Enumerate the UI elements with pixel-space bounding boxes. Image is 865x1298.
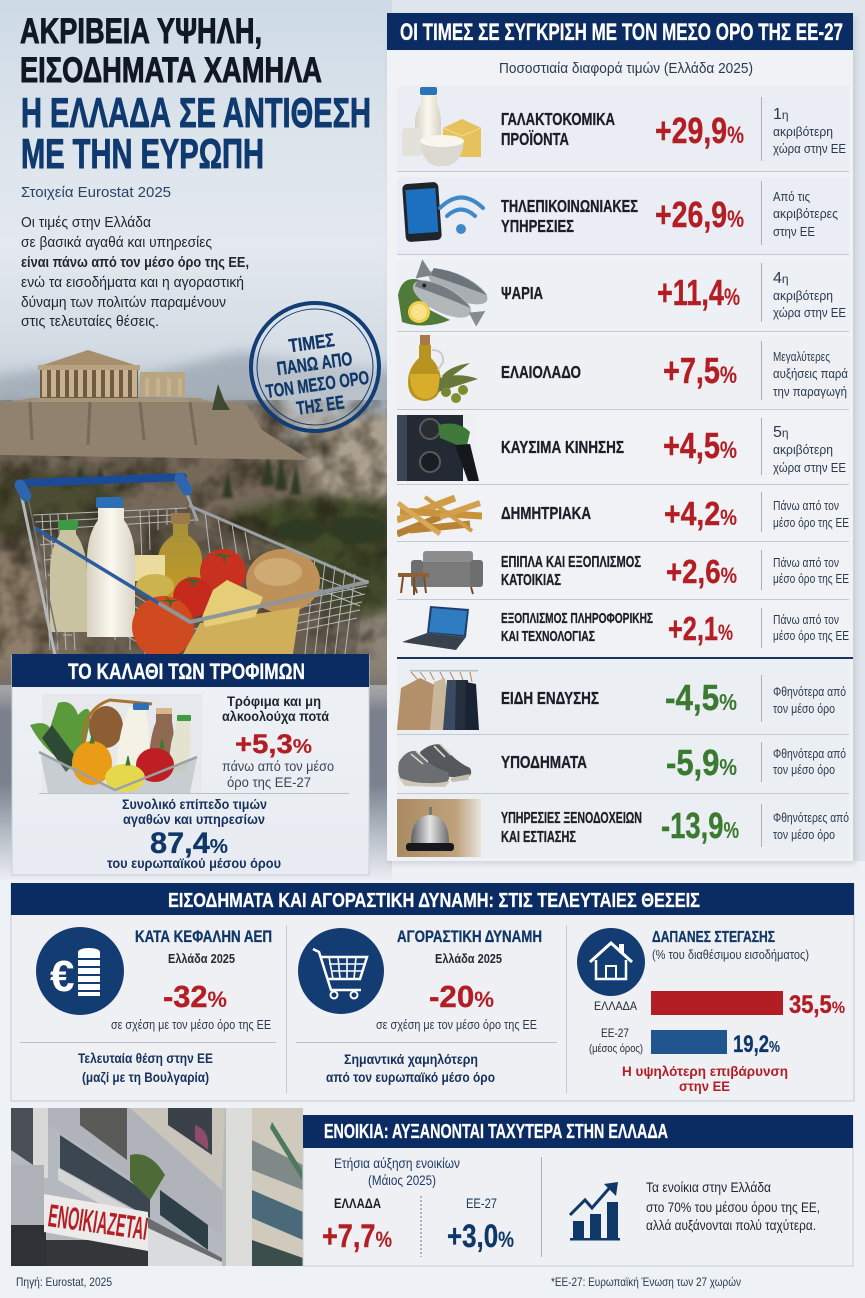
value: -32%: -32% bbox=[163, 979, 227, 1014]
bar: Greece bbox=[594, 991, 845, 1019]
value: +2,6%: +2,6% bbox=[666, 553, 737, 590]
note: above EU average: Πάνω από τον bbox=[773, 612, 839, 627]
intro paragraph bbox=[21, 215, 249, 330]
label: IT equipment: ΚΑΙ ΤΕΧΝΟΛΟΓΙΑΣ bbox=[501, 628, 595, 645]
callout: highest burden in EU bbox=[622, 1063, 788, 1094]
bar: EU-27: ΕΕ-27 bbox=[601, 1026, 629, 1040]
note: 4th most expensive bbox=[773, 270, 846, 320]
row: IT equipment bbox=[402, 606, 849, 650]
icon: phone and wifi bbox=[402, 182, 483, 242]
label: telecommunications: ΥΠΗΡΕΣΙΕΣ bbox=[501, 216, 574, 236]
row: fuel bbox=[397, 415, 846, 481]
text: annual rent growth: Ετήσια αύξηση ενοικίων bbox=[334, 1156, 460, 1171]
column: GDP per capita bbox=[20, 927, 276, 1085]
bottom fade of the photo bbox=[0, 640, 392, 880]
bar: EU-27: (μέσος όρος) bbox=[589, 1043, 643, 1055]
note: cheaper than average bbox=[773, 684, 846, 716]
note: most expensive bbox=[773, 106, 846, 156]
value: 87,4%: 87,4% bbox=[150, 827, 228, 860]
bar: Greece: ΕΛΛΑΔΑ bbox=[594, 999, 637, 1013]
note: most expensive: χώρα στην ΕΕ bbox=[773, 141, 846, 156]
value: +2,1%: +2,1% bbox=[668, 610, 733, 647]
bar: EU-27: 19,2% bbox=[733, 1031, 780, 1058]
label: clothing: ΕΙΔΗ ΕΝΔΥΣΗΣ bbox=[501, 688, 599, 708]
label: hotels and restaurants: ΚΑΙ ΕΣΤΙΑΣΗΣ bbox=[501, 829, 576, 846]
panel header: rents bbox=[303, 1115, 853, 1148]
value: -20%: -20% bbox=[429, 979, 494, 1014]
text: compared to EU average: σε σχέση με τον μέσο όρο της ΕΕ bbox=[111, 1017, 271, 1032]
note: biggest increases: Μεγαλύτερες bbox=[773, 349, 830, 364]
text: overall price level: Συνολικό επίπεδο τιμών bbox=[122, 797, 267, 812]
icon: reception bell bbox=[397, 799, 481, 857]
footer: source: Πηγή: Eurostat, 2025 bbox=[16, 1275, 112, 1289]
icon: euro and coins: € bbox=[50, 952, 74, 1001]
panel header: incomes bbox=[11, 883, 854, 915]
background photo: Acropolis landscape bbox=[0, 350, 400, 880]
value: +29,9%: +29,9% bbox=[655, 110, 744, 151]
note: cheaper than average bbox=[773, 746, 846, 777]
stamp: prices above EU average bbox=[243, 295, 387, 439]
row: clothing bbox=[397, 670, 846, 730]
icon: shopping cart bbox=[298, 928, 384, 1014]
intro paragraph: στις τελευταίες θέσεις. bbox=[21, 314, 159, 330]
text: rents at 70% of EU average: στο 70% του μέσου όρου της ΕΕ, bbox=[646, 1199, 820, 1215]
panel header: food basket bbox=[12, 654, 369, 687]
oil bottle bbox=[171, 513, 190, 524]
note: cheaper than average: τον μέσο όρο bbox=[773, 701, 835, 716]
note: among the most expensive bbox=[773, 189, 838, 239]
callout: highest burden in EU: Η υψηλότερη επιβάρυνση bbox=[622, 1063, 788, 1079]
top balcony bbox=[168, 1108, 212, 1155]
intro paragraph: είναι πάνω από τον μέσο όρο της ΕΕ, bbox=[21, 255, 249, 271]
label: telecommunications: ΤΗΛΕΠΙΚΟΙΝΩΝΙΑΚΕΣ bbox=[501, 196, 638, 216]
stamp: prices above EU average: ΤΙΜΕΣ bbox=[287, 330, 336, 357]
footer: EU-27 note: *ΕΕ-27: Ευρωπαϊκή Ένωση των 27 χωρών bbox=[551, 1275, 741, 1289]
text: annual rent growth bbox=[334, 1156, 460, 1188]
note: 5th most expensive bbox=[773, 424, 846, 475]
text: food and non-alcoholic beverages bbox=[222, 693, 329, 724]
chart subtitle: Ποσοστιαία διαφορά τιμών (Ελλάδα 2025) bbox=[499, 61, 753, 77]
label: hotels and restaurants bbox=[501, 810, 642, 846]
text: significantly lower bbox=[326, 1052, 495, 1085]
note: among the most expensive: ακριβότερες bbox=[773, 206, 838, 221]
note: above EU average: Πάνω από τον bbox=[773, 498, 839, 513]
note: among the most expensive: στην ΕΕ bbox=[773, 224, 815, 239]
bar: Greece: 35,5% bbox=[789, 991, 845, 1019]
panel header: rents: ΕΝΟΙΚΙΑ: ΑΥΞΑΝΟΝΤΑΙ ΤΑΧΥΤΕΡΑ ΣΤΗΝ ΕΛΛΑΔΑ bbox=[324, 1121, 668, 1143]
label: dairy products bbox=[501, 109, 615, 149]
icon: dairy bbox=[402, 87, 481, 166]
icon: fish bbox=[398, 258, 492, 331]
note: cheaper than average: τον μέσο όρο bbox=[773, 762, 835, 777]
note: 4th most expensive: 4η bbox=[773, 270, 789, 287]
heading: housing costs: ΔΑΠΑΝΕΣ ΣΤΕΓΑΣΗΣ bbox=[652, 929, 775, 946]
note: cheaper than average: Φθηνότερα από bbox=[773, 684, 846, 699]
note: most expensive: 1η bbox=[773, 106, 789, 123]
icon: fuel pump bbox=[397, 415, 479, 481]
column: purchasing power bbox=[296, 927, 557, 1085]
row: olive oil bbox=[408, 335, 848, 403]
row: telecommunications bbox=[402, 181, 838, 245]
photo: apartment building with rent sign: ΕΝΟΙΚΙΑΖΕΤΑΙ bbox=[46, 1197, 150, 1247]
right building bbox=[226, 1108, 252, 1266]
icon: olive oil bbox=[408, 335, 478, 403]
column: housing costs bbox=[577, 928, 845, 1094]
text: last place in EU bbox=[78, 1051, 213, 1085]
bar chart: housing costs bbox=[589, 991, 845, 1058]
text: above EU-27 average: όρο της ΕΕ-27 bbox=[227, 774, 311, 790]
milk bottle bbox=[87, 508, 135, 637]
text: Greece 2025: Ελλάδα 2025 bbox=[435, 951, 502, 966]
note: biggest increases: αυξήσεις παρά bbox=[773, 366, 848, 381]
panel: incomes and purchasing power bbox=[11, 883, 854, 1101]
icon: house bbox=[577, 928, 645, 996]
intro paragraph: σε βασικά αγαθά και υπηρεσίες bbox=[21, 235, 212, 251]
cheese block bbox=[135, 555, 165, 581]
title bbox=[20, 12, 371, 177]
row: cereals bbox=[397, 492, 849, 534]
note: 4th most expensive: χώρα στην ΕΕ bbox=[773, 305, 846, 320]
note: 5th most expensive: χώρα στην ΕΕ bbox=[773, 460, 846, 475]
value: -5,9%: -5,9% bbox=[666, 742, 737, 783]
text: above EU-27 average bbox=[222, 758, 334, 790]
label: olive oil: ΕΛΑΙΟΛΑΔΟ bbox=[501, 362, 581, 382]
heading: GDP per capita: ΚΑΤΑ ΚΕΦΑΛΗΝ ΑΕΠ bbox=[135, 927, 272, 946]
note: above EU average bbox=[773, 612, 849, 643]
text: last place in EU: Τελευταία θέση στην ΕΕ bbox=[78, 1051, 213, 1066]
Parthenon bbox=[0, 350, 310, 460]
row: furniture bbox=[398, 550, 849, 595]
note: 4th most expensive: ακριβότερη bbox=[773, 288, 833, 303]
title: Η ΕΛΛΑΔΑ ΣΕ ΑΝΤΙΘΕΣΗ bbox=[21, 89, 371, 136]
stat: EU-27 rent growth bbox=[447, 1195, 514, 1254]
note: biggest increases: την παραγωγή bbox=[773, 384, 847, 399]
text: above EU-27 average: πάνω από τον μέσο bbox=[222, 758, 334, 774]
intro paragraph: ενώ τα εισοδήματα και η αγοραστική bbox=[21, 275, 244, 291]
label: furniture bbox=[501, 554, 641, 589]
text: significantly lower: από τον ευρωπαϊκό μέσο όρο bbox=[326, 1070, 495, 1085]
wall and concrete slabs bbox=[130, 1108, 225, 1190]
label: furniture: ΚΑΤΟΙΚΙΑΣ bbox=[501, 572, 561, 589]
label: fish: ΨΑΡΙΑ bbox=[501, 283, 543, 303]
title: ΜΕ ΤΗΝ ΕΥΡΩΠΗ bbox=[21, 130, 264, 177]
icon: euro and coins bbox=[36, 927, 124, 1015]
subtitle: source: Στοιχεία Eurostat 2025 bbox=[21, 184, 171, 201]
panel: rents bbox=[303, 1115, 853, 1266]
left corner bbox=[11, 1108, 33, 1165]
text: food and non-alcoholic beverages: Τρόφιμα και μη bbox=[227, 693, 321, 709]
panel header: incomes: ΕΙΣΟΔΗΜΑΤΑ ΚΑΙ ΑΓΟΡΑΣΤΙΚΗ ΔΥΝΑΜΗ: ΣΤΙΣ ΤΕΛΕΥΤΑΙΕΣ ΘΕΣΕΙΣ bbox=[168, 890, 700, 912]
middle balcony bbox=[60, 1135, 150, 1218]
text: rents at 70% of EU average bbox=[646, 1179, 820, 1233]
value: -4,5%: -4,5% bbox=[665, 677, 737, 718]
note: cheaper than average: Φθηνότερα από bbox=[773, 746, 846, 761]
note: above EU average: Πάνω από τον bbox=[773, 555, 839, 570]
icon: sofa bbox=[398, 551, 483, 595]
icon: wheat bbox=[397, 497, 482, 534]
note: most expensive: ακριβότερη bbox=[773, 124, 833, 139]
intro paragraph: Οι τιμές στην Ελλάδα bbox=[21, 215, 151, 231]
cart frame bbox=[20, 477, 367, 660]
value: +11,4%: +11,4% bbox=[657, 272, 740, 313]
stat: Greece rent growth: ΕΛΛΑΔΑ bbox=[334, 1195, 381, 1211]
note: cheaper than average bbox=[773, 810, 849, 842]
label: dairy products: ΠΡΟΪΟΝΤΑ bbox=[501, 129, 569, 149]
text: rents at 70% of EU average: αλλά αυξάνονται πολύ ταχύτερα. bbox=[646, 1217, 816, 1233]
row: hotels and restaurants bbox=[397, 799, 849, 857]
panel: food basket bbox=[12, 654, 369, 875]
text: significantly lower: Σημαντικά χαμηλότερη bbox=[344, 1052, 478, 1067]
value: +4,2%: +4,2% bbox=[664, 495, 737, 532]
label: dairy products: ΓΑΛΑΚΤΟΚΟΜΙΚΑ bbox=[501, 109, 615, 129]
value: -13,9%: -13,9% bbox=[661, 805, 739, 846]
label: telecommunications bbox=[501, 196, 638, 236]
note: above EU average bbox=[773, 555, 849, 586]
bread bbox=[246, 549, 320, 613]
text: overall price level bbox=[122, 797, 267, 827]
sign: for rent bbox=[44, 1194, 150, 1251]
stamp: prices above EU average: ΤΗΣ ΕΕ bbox=[295, 392, 346, 420]
label: IT equipment: ΕΞΟΠΛΙΣΜΟΣ ΠΛΗΡΟΦΟΡΙΚΗΣ bbox=[501, 610, 653, 627]
lower balcony bbox=[160, 1190, 208, 1250]
text: Greece 2025: Ελλάδα 2025 bbox=[168, 951, 235, 966]
stat: Greece rent growth bbox=[322, 1195, 392, 1254]
stamp: prices above EU average: ΤΟΝ ΜΕΣΟ ΟΡΟ bbox=[265, 368, 371, 403]
heading: purchasing power: ΑΓΟΡΑΣΤΙΚΗ ΔΥΝΑΜΗ bbox=[397, 927, 542, 946]
note: above EU average bbox=[773, 498, 849, 530]
label: IT equipment bbox=[501, 610, 653, 645]
icon: rising bar chart bbox=[570, 1182, 620, 1240]
illustration: basket with groceries bbox=[30, 694, 202, 793]
icon: shoes bbox=[398, 744, 471, 787]
text: compared to EU average: σε σχέση με τον μέσο όρο της ΕΕ bbox=[376, 1017, 537, 1032]
text: food and non-alcoholic beverages: αλκοολούχα ποτά bbox=[222, 708, 329, 724]
tomatoes bbox=[200, 549, 246, 595]
label: furniture: ΕΠΙΠΛΑ ΚΑΙ ΕΞΟΠΛΙΣΜΟΣ bbox=[501, 554, 641, 571]
text: rents at 70% of EU average: Τα ενοίκια στην Ελλάδα bbox=[646, 1179, 771, 1195]
row: fish bbox=[398, 258, 846, 331]
row: dairy products bbox=[402, 87, 846, 166]
note: 5th most expensive: ακριβότερη bbox=[773, 442, 833, 457]
icon: laptop bbox=[402, 606, 469, 650]
intro paragraph: δύναμη των πολιτών παραμένουν bbox=[21, 295, 226, 311]
row: footwear bbox=[398, 742, 846, 787]
shopping cart bbox=[20, 477, 367, 660]
text: last place in EU: (μαζί με τη Βουλγαρία) bbox=[82, 1070, 209, 1085]
stat: EU-27 rent growth: ΕΕ-27 bbox=[466, 1195, 497, 1211]
bar: EU-27 bbox=[589, 1026, 780, 1058]
text: of the European average: του ευρωπαϊκού μέσου όρου bbox=[107, 856, 281, 871]
stat: EU-27 rent growth: +3,0% bbox=[447, 1218, 514, 1254]
title: ΑΚΡΙΒΕΙΑ ΥΨΗΛΗ, bbox=[20, 12, 262, 51]
label: footwear: ΥΠΟΔΗΜΑΤΑ bbox=[501, 752, 587, 772]
stamp: prices above EU average: ΠΑΝΩ ΑΠΟ bbox=[276, 349, 354, 380]
callout: highest burden in EU: στην ΕΕ bbox=[679, 1078, 730, 1094]
value: +5,3%: +5,3% bbox=[235, 729, 312, 759]
panel header: price comparison bbox=[387, 13, 853, 50]
note: among the most expensive: Από τις bbox=[773, 189, 810, 204]
photo: apartment building with rent sign bbox=[11, 1108, 303, 1266]
icon: clothes rack bbox=[397, 670, 479, 730]
value: +26,9%: +26,9% bbox=[655, 194, 744, 235]
small bottle bbox=[50, 526, 87, 632]
text: overall price level: αγαθών και υπηρεσίων bbox=[123, 812, 265, 827]
stat: Greece rent growth: +7,7% bbox=[322, 1218, 392, 1254]
trees on the hillside bbox=[76, 459, 387, 544]
panel header: food basket: ΤΟ ΚΑΛΑΘΙ ΤΩΝ ΤΡΟΦΙΜΩΝ bbox=[68, 659, 305, 684]
text: annual rent growth: (Μάιος 2025) bbox=[368, 1173, 436, 1188]
value: +4,5%: +4,5% bbox=[663, 425, 737, 466]
note: cheaper than average: τον μέσο όρο bbox=[773, 827, 835, 842]
text: share of disposable income: (% του διαθέσιμου εισοδήματος) bbox=[652, 948, 809, 962]
label: hotels and restaurants: ΥΠΗΡΕΣΙΕΣ ΞΕΝΟΔΟΧΕΙΩΝ bbox=[501, 810, 642, 827]
note: 5th most expensive: 5η bbox=[773, 424, 789, 441]
value: +7,5%: +7,5% bbox=[663, 350, 737, 391]
panel: price comparison with EU-27 bbox=[387, 13, 856, 864]
title: ΕΙΣΟΔΗΜΑΤΑ ΧΑΜΗΛΑ bbox=[20, 51, 322, 90]
cheese wedge bbox=[183, 607, 300, 654]
label: cereals: ΔΗΜΗΤΡΙΑΚΑ bbox=[501, 503, 591, 523]
note: biggest increases bbox=[773, 349, 848, 399]
label: fuel: ΚΑΥΣΙΜΑ ΚΙΝΗΣΗΣ bbox=[501, 437, 624, 457]
